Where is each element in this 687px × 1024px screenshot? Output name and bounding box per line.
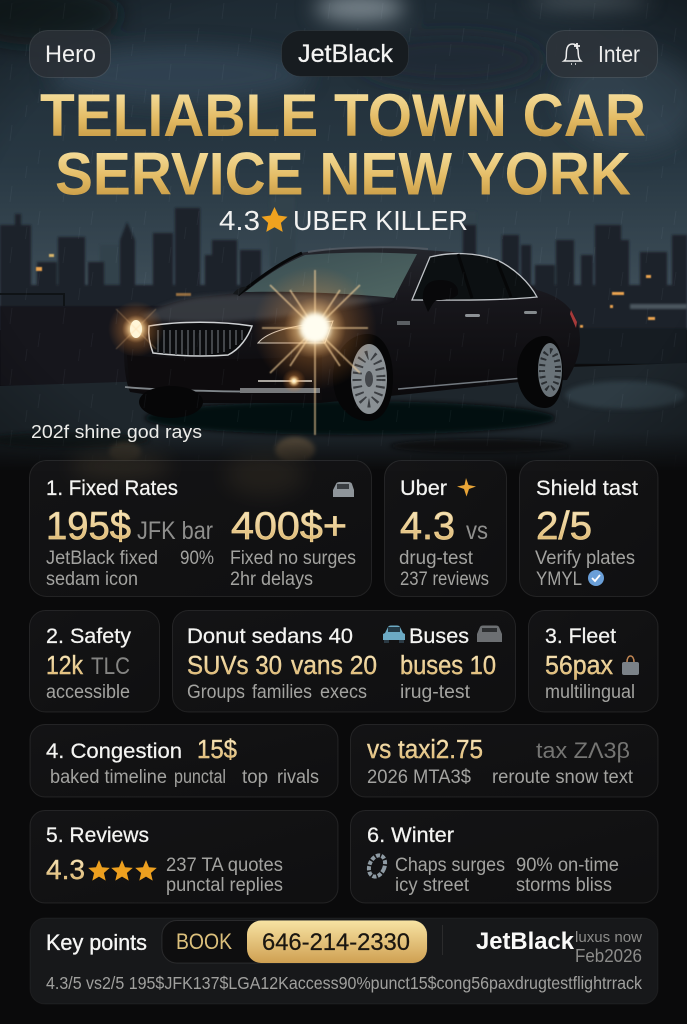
panel: fixed rates: 195$ — [46, 505, 131, 548]
title: TELIABLE TOWN CAR — [40, 82, 646, 149]
panel: safety — [30, 610, 160, 712]
panel: Uber comparison: vs — [466, 517, 488, 545]
panel: fleet donut: Donut sedans 40 — [187, 624, 353, 648]
right headlight starburst — [235, 266, 395, 435]
icon: car — [333, 482, 354, 497]
panel: Uber comparison — [384, 460, 506, 596]
panel: winter: 6. Winter — [367, 823, 454, 847]
booking button — [162, 920, 427, 963]
vignette and bottom fade — [0, 0, 687, 470]
panel: congestion — [30, 724, 338, 797]
pill: JetBlack — [282, 30, 408, 76]
panel: fleet donut: vans 20 — [291, 652, 377, 680]
panel: Uber comparison: Uber — [400, 476, 447, 500]
brand lockup: luxus now — [575, 929, 642, 946]
title: SERVICE NEW YORK — [55, 140, 631, 208]
caption: 202f shine god rays — [31, 422, 202, 442]
panel: winter: storms bliss — [516, 875, 612, 896]
pill: Inter with bell icon: Inter — [598, 41, 640, 67]
hood highlight — [140, 294, 393, 322]
icon: verified badge — [588, 570, 604, 586]
panel: winter: 90% on-time — [516, 855, 619, 876]
panel: fixed rates: JetBlack fixed — [46, 548, 158, 569]
panel: shield test: YMYL — [536, 569, 582, 590]
panel: fleet donut: execs — [320, 682, 367, 703]
panel: safety: 12k — [46, 652, 83, 680]
icon: gold star — [457, 478, 476, 496]
windshield — [245, 253, 417, 298]
brand lockup — [476, 928, 642, 966]
panel: fixed rates — [30, 452, 372, 596]
brand lockup: JetBlack — [476, 928, 575, 955]
panel: reviews: punctal replies — [166, 875, 283, 896]
panel: fleet donut: Groups — [187, 682, 245, 703]
grille — [149, 322, 252, 356]
panel: fixed rates: JFK bar — [137, 517, 213, 545]
side windows — [412, 254, 537, 300]
panel: congestion: 15$ — [197, 736, 237, 764]
panel: safety: TLC — [91, 653, 130, 680]
panel: taxi comparison: reroute snow text — [492, 767, 634, 788]
panel: Uber comparison: drug-test — [399, 548, 474, 569]
door handles — [465, 314, 480, 317]
icon: bell — [564, 43, 581, 64]
front wheel right — [333, 334, 393, 421]
panel: fleet capacity — [528, 610, 658, 712]
panel: fleet capacity: multilingual — [545, 682, 635, 703]
fender badge — [397, 321, 410, 325]
panel: shield test: Shield tast — [536, 476, 638, 500]
wing mirror — [423, 280, 458, 312]
panel: congestion: baked timeline — [50, 767, 167, 788]
brand lockup: Feb2026 — [575, 946, 642, 966]
panel: fleet donut — [172, 610, 516, 712]
panel: fixed rates: 400$+ — [231, 505, 347, 548]
pill: JetBlack: JetBlack — [298, 40, 394, 68]
pill: Hero: Hero — [45, 41, 96, 68]
panel: taxi comparison — [350, 724, 658, 797]
pill: Inter with bell icon — [546, 30, 658, 78]
panel: fixed rates: 90% — [180, 548, 214, 569]
panel: shield test — [520, 460, 658, 596]
panel: safety: 2. Safety — [46, 624, 131, 648]
panel: fixed rates: 1. Fixed Rates — [46, 476, 178, 500]
panel: reviews: 237 TA quotes — [166, 855, 283, 876]
panel: fleet donut: Buses — [409, 624, 469, 648]
icon: blue car — [383, 626, 405, 643]
left headlight glow — [108, 301, 164, 357]
panel: fleet donut: families — [252, 682, 312, 703]
panel: key points footer: 4.3/5 vs2/5 195$JFK137$LGA12Kaccess90%punct15$cong56paxdrugtestflightrrack — [46, 973, 642, 993]
rain overlay — [0, 0, 687, 470]
panel: reviews — [30, 810, 338, 903]
hero scene: rainy New York skyline — [0, 0, 687, 470]
wet road — [0, 363, 687, 470]
panel: winter — [350, 810, 658, 903]
car body — [124, 248, 580, 403]
panel: winter: icy street — [395, 875, 470, 896]
booking button: 646-214-2330 — [262, 929, 410, 956]
panel: congestion: 4. Congestion — [46, 739, 182, 763]
front bumper chrome — [125, 387, 320, 392]
panel: taxi comparison: 2026 MTA3$ — [367, 767, 471, 788]
panel: key points footer: Key points — [46, 930, 147, 955]
panel: fleet capacity: 56pax — [545, 652, 613, 680]
panel: safety: accessible — [46, 682, 130, 703]
panel: fleet donut: irug-test — [400, 682, 471, 703]
panel: reviews: 5. Reviews — [46, 823, 149, 847]
panel: winter: Chaps surges — [395, 855, 505, 876]
panel: fleet donut: buses 10 — [400, 652, 496, 680]
front wheel left — [139, 386, 203, 418]
roof edge — [308, 247, 428, 252]
fog light strip — [258, 380, 312, 382]
icon: three stars — [88, 860, 157, 881]
icon: dark car — [477, 626, 502, 642]
fog lamp — [282, 369, 306, 393]
panel: Uber comparison: 237 reviews — [400, 569, 489, 590]
panel: congestion: rivals — [277, 767, 319, 788]
panel: fixed rates: sedam icon — [46, 569, 138, 590]
booking button: BOOK — [176, 929, 232, 954]
panel: fixed rates: Fixed no surges — [230, 548, 356, 569]
panel: fleet capacity: 3. Fleet — [545, 624, 616, 648]
panel: congestion: punctal — [174, 767, 226, 788]
panel: key points footer — [30, 918, 658, 1004]
icon: star — [261, 207, 288, 232]
pill: Hero — [30, 30, 110, 78]
panel: taxi comparison: tax ZΛ3β — [536, 738, 630, 763]
subtitle rating: UBER KILLER — [293, 205, 468, 236]
panel: taxi comparison: vs taxi2.75 — [367, 736, 483, 764]
panel: fixed rates: 2hr delays — [230, 569, 313, 590]
title — [40, 82, 646, 208]
sill line — [398, 378, 523, 389]
panel: shield test: Verify plates — [535, 548, 635, 569]
rear wheel — [517, 336, 563, 408]
icon: snow chain — [366, 853, 388, 879]
barrier wall — [0, 306, 200, 386]
black sedan with glowing headlights — [108, 247, 580, 435]
icon: bag — [622, 656, 639, 675]
lower fascia — [127, 355, 322, 400]
panel: Uber comparison: 4.3 — [400, 505, 455, 548]
panel: reviews: 4.3 — [46, 854, 85, 885]
panel: fleet donut: SUVs 30 — [187, 652, 282, 680]
headlight housing — [258, 321, 333, 343]
panel: congestion: top — [242, 767, 268, 788]
subtitle rating: 4.3 — [219, 205, 260, 236]
panel: shield test: 2/5 — [536, 505, 592, 548]
subtitle rating — [219, 205, 468, 236]
tail light — [570, 310, 577, 328]
